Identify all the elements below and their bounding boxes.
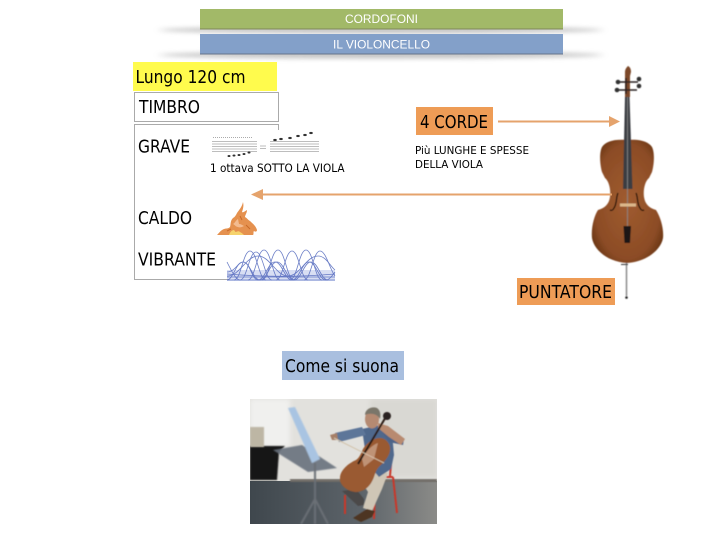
shirt <box>362 425 394 477</box>
cello f-holes <box>610 193 618 210</box>
text: GRAVE: GRAVE <box>138 138 190 158</box>
cello tailpiece <box>624 226 631 243</box>
head <box>365 410 379 428</box>
header bar: CORDOFONI: CORDOFONI <box>345 12 418 26</box>
cello body <box>592 140 663 263</box>
text: Più lunghe e spesse della viola: DELLA VIOLA <box>415 158 483 171</box>
box: TIMBRO: TIMBRO <box>138 98 200 118</box>
label: Come si suona <box>282 351 404 380</box>
music stand <box>273 407 337 524</box>
header bar: IL VIOLONCELLO <box>159 34 603 58</box>
box: TIMBRO <box>134 92 278 122</box>
cello <box>340 438 390 492</box>
icon: music staves <box>212 132 319 157</box>
icon: flame <box>217 202 257 235</box>
icon: vibrating waves <box>227 250 335 281</box>
cello fingerboard and strings <box>623 96 632 189</box>
cello bridge <box>620 204 636 206</box>
panel: timbre qualities <box>134 124 290 285</box>
cellist <box>330 407 405 522</box>
label: PUNTATORE <box>517 278 615 305</box>
cello endpin <box>626 262 628 296</box>
floor <box>250 481 437 524</box>
label: 4 CORDE <box>416 107 493 135</box>
label: 4 CORDE: 4 CORDE <box>420 113 488 133</box>
header bar: IL VIOLONCELLO: IL VIOLONCELLO <box>333 38 430 52</box>
label: Lungo 120 cm: Lungo 120 cm <box>136 68 246 88</box>
chair <box>345 452 397 519</box>
trousers and shoes <box>360 471 388 511</box>
text: 1 ottava SOTTO LA VIOLA: 1 ottava SOTTO LA VIOLA <box>210 161 345 175</box>
photo: cellist on stage <box>250 399 437 524</box>
arrow: to timbre panel <box>251 189 612 200</box>
text: CALDO: CALDO <box>138 209 192 229</box>
image: cello <box>592 66 663 299</box>
label: Lungo 120 cm <box>133 62 277 91</box>
text: Più lunghe e spesse della viola: Più LUNGHE E SPESSE <box>415 144 529 157</box>
arrow: 4 corde to strings <box>498 116 620 127</box>
label: PUNTATORE: PUNTATORE <box>519 283 612 303</box>
wall <box>250 399 437 524</box>
piano <box>250 446 285 480</box>
label: Come si suona: Come si suona <box>285 357 399 377</box>
header bar: CORDOFONI <box>159 9 603 34</box>
text: Più lunghe e spesse della viola <box>415 144 529 171</box>
cello pegbox and scroll <box>625 66 631 97</box>
text: VIBRANTE: VIBRANTE <box>138 250 216 270</box>
